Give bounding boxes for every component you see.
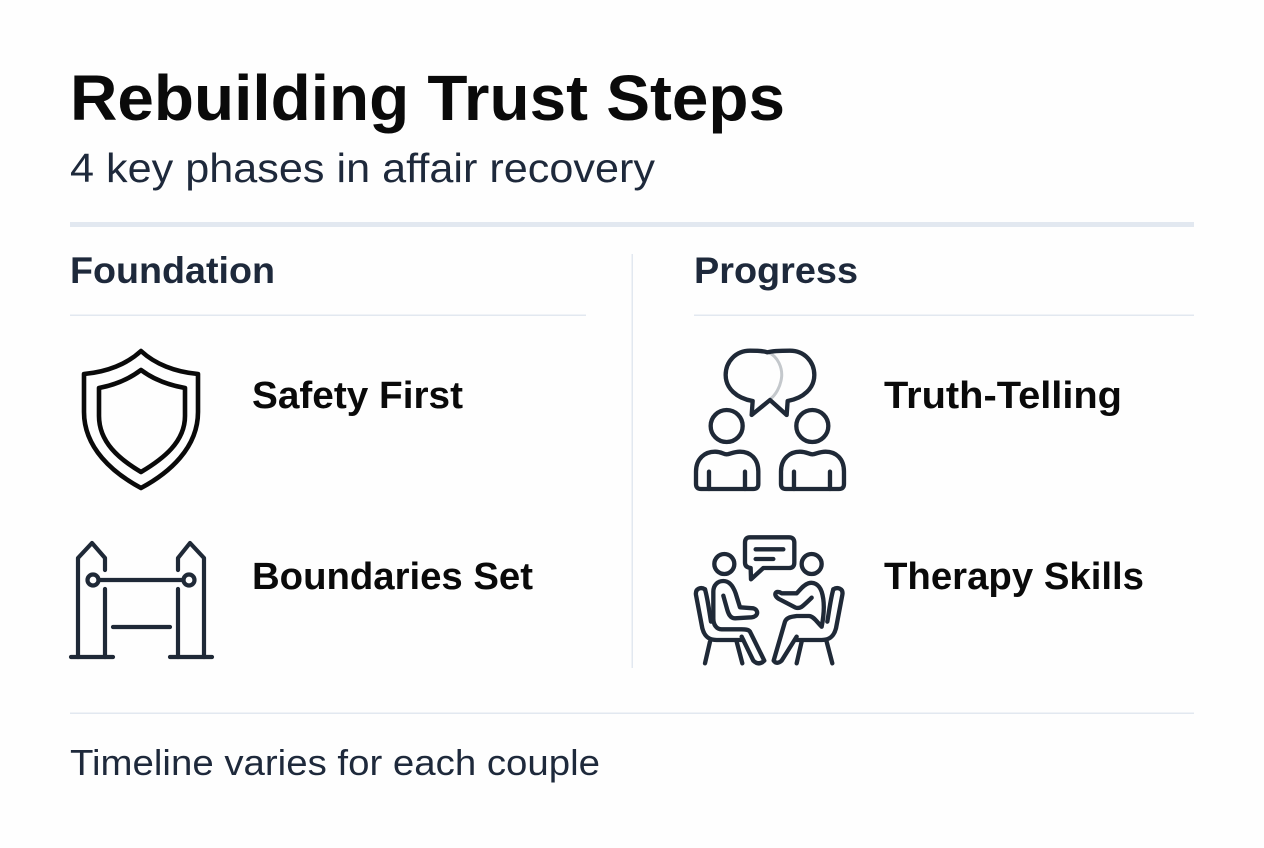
label: therapy skills: Therapy Skills: [884, 556, 1144, 598]
subtitle: 4 key phases in affair recovery: [70, 145, 656, 191]
label: boundaries set: Boundaries Set: [252, 556, 533, 598]
heading: foundation: Foundation: [70, 250, 275, 291]
icon: shield: [84, 351, 198, 488]
icon: fence with rope barrier: [71, 543, 212, 657]
icon: two people with speech bubbles: [696, 351, 844, 489]
heading: progress: Progress: [694, 250, 858, 291]
footer note: Timeline varies for each couple: [70, 742, 600, 783]
label: truth-telling: Truth-Telling: [884, 375, 1122, 417]
title: Rebuilding Trust Steps: [70, 62, 785, 134]
panel: progress: [694, 250, 1194, 663]
icon: therapy session: [696, 537, 842, 663]
panel: foundation: [70, 250, 586, 657]
label: safety first: Safety First: [252, 375, 463, 417]
